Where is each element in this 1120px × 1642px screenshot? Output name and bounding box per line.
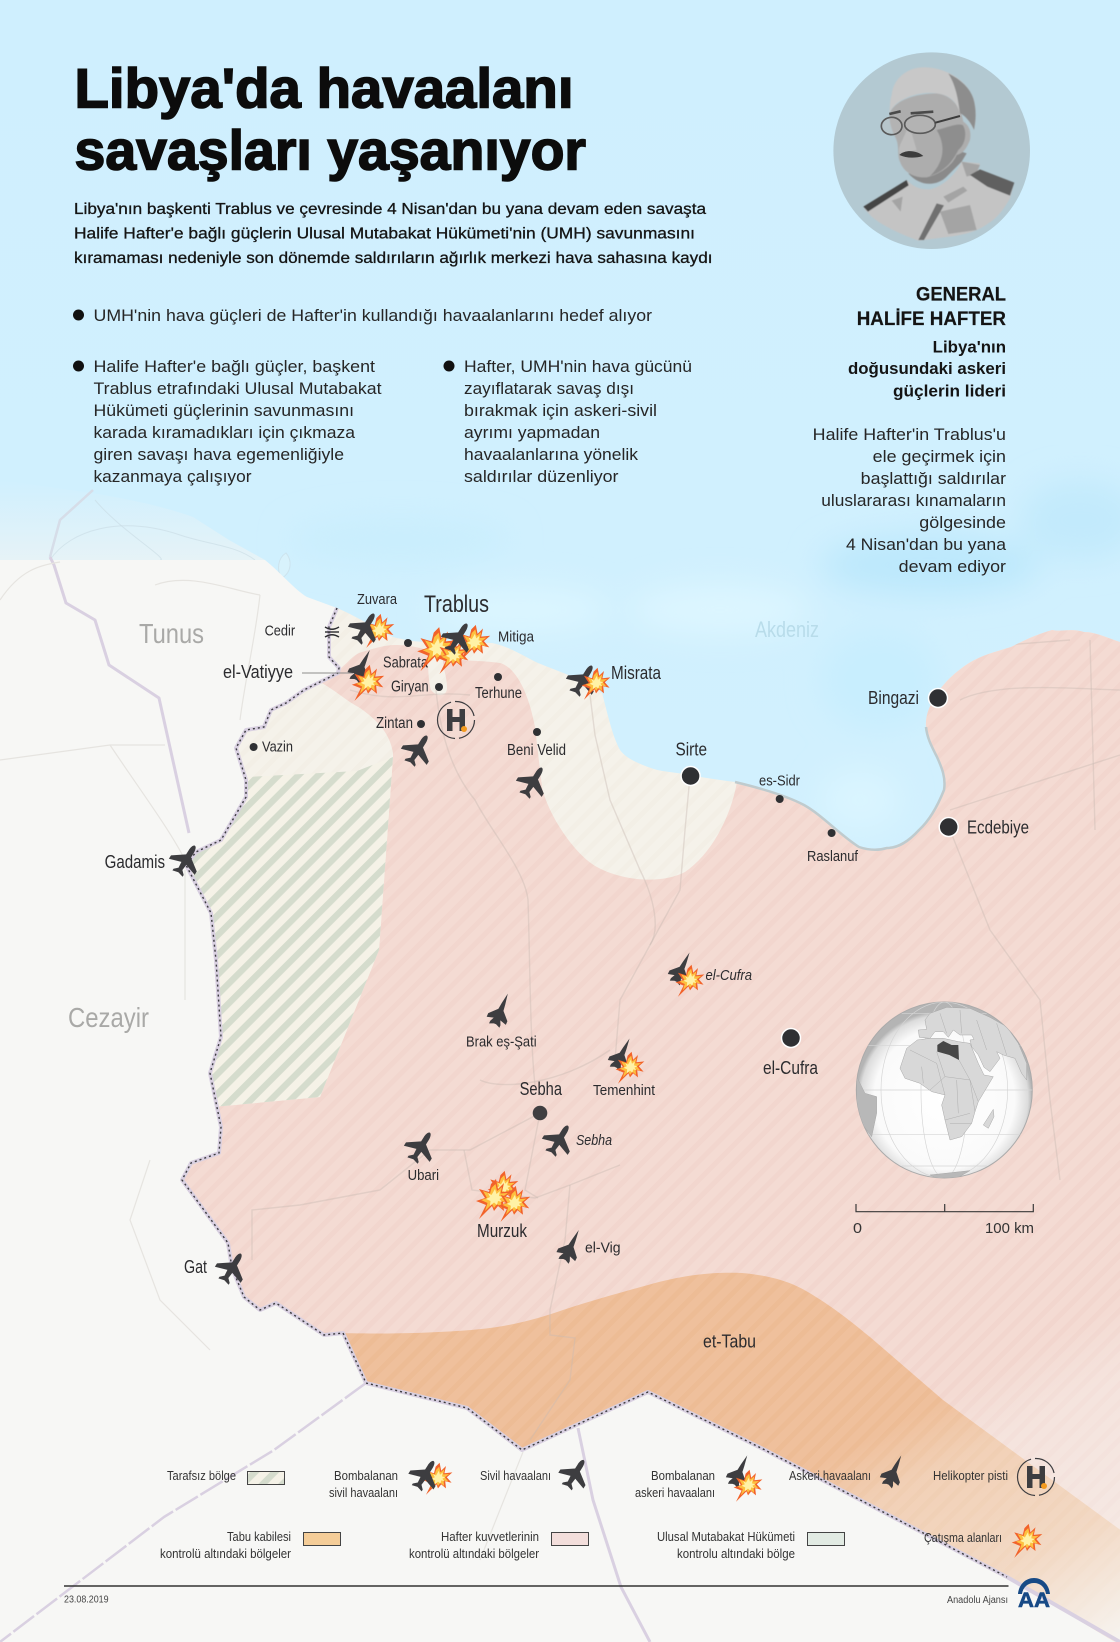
- lede paragraph: Libya'nın başkenti Trablus ve çevresinde 4 Nisan'dan bu yana devam eden savaşta: [74, 201, 706, 218]
- bullet: civil military: zayıflatarak savaş dışı: [464, 379, 634, 398]
- biography heading: [857, 284, 1006, 330]
- city labels: et-Tabu: [703, 1332, 756, 1352]
- locator globe: [856, 1002, 1033, 1178]
- icon: airfield Sebha: [538, 1118, 581, 1162]
- legend: Hafter zone: Hafter kuvvetlerinin: [441, 1529, 539, 1544]
- bullet: civil military: [444, 357, 692, 486]
- city labels: Ecdebiye: [967, 818, 1029, 838]
- icon: Cedir border crossing: [325, 627, 339, 637]
- city labels: Cedir: [265, 623, 295, 640]
- portrait: Halife Hafter: [833, 52, 1030, 249]
- title: [74, 56, 586, 181]
- biography text: devam ediyor: [899, 558, 1007, 576]
- biography heading: GENERAL: [916, 284, 1006, 306]
- title: savaşları yaşanıyor: [74, 118, 586, 181]
- logo: Anadolu Agency: AA: [1018, 1589, 1050, 1612]
- biography text: gölgesinde: [919, 514, 1006, 532]
- lede paragraph: [74, 201, 712, 267]
- country label: Tunus: Tunus: [139, 618, 204, 649]
- city labels: el-Vatiyye: [223, 662, 293, 682]
- icon: airfield Gat: [211, 1246, 254, 1290]
- biography subtitle: doğusundaki askeri: [848, 360, 1006, 378]
- Tebu-held orange zone: [300, 1273, 1120, 1642]
- icon: bombed airfield Zuvara: [344, 606, 394, 650]
- icon: airfield Ubari: [400, 1125, 443, 1169]
- bullet: deadlock: giren savaşı hava egemenliğiyle: [94, 445, 344, 464]
- bullet: deadlock: Hükümeti güçlerinin savunmasını: [94, 401, 354, 420]
- city labels: Ubari: [408, 1167, 439, 1184]
- city labels: Beni Velid: [507, 742, 566, 759]
- city labels: Murzuk: [477, 1221, 528, 1241]
- map scale: [853, 1204, 1034, 1237]
- legend: [160, 1451, 1054, 1561]
- city labels: Brak eş-Şati: [466, 1035, 537, 1051]
- legend: clash zones: [924, 1524, 1042, 1558]
- city labels: Sebha: [520, 1079, 563, 1099]
- city labels: Mitiga: [498, 629, 535, 646]
- bullet: deadlock: Trablus etrafındaki Ulusal Mutabakat: [94, 379, 382, 398]
- legend: government zone: [657, 1529, 844, 1561]
- city labels: Raslanuf: [807, 849, 859, 865]
- bullet: deadlock: kazanmaya çalışıyor: [94, 467, 252, 486]
- icon: helicopter pad Giryan: [438, 702, 474, 738]
- sea tones: [0, 480, 1120, 830]
- map labels: [68, 591, 1029, 1352]
- city labels: Gadamis: [105, 852, 165, 872]
- legend: military airport: [789, 1451, 910, 1490]
- icon: airfield Zintan: [397, 728, 440, 772]
- city dots: [250, 639, 958, 1120]
- logo: Anadolu Agency: [1018, 1578, 1050, 1612]
- city labels: Gat: [184, 1257, 207, 1277]
- biography subtitle: [848, 339, 1006, 401]
- Libya: Government-held cream zone base: [238, 608, 1118, 880]
- icon: military airfield el-Vig: [554, 1225, 588, 1266]
- sea label: Akdeniz: Akdeniz: [755, 617, 819, 642]
- biography text: başlattığı saldırılar: [861, 470, 1007, 488]
- icon: military airfield Brak: [485, 990, 517, 1030]
- footer rule: [64, 1585, 1008, 1587]
- legend: bombed military airport: askeri havaalanı: [635, 1485, 715, 1500]
- bullet: deadlock: Halife Hafter'e bağlı güçler, başkent: [94, 357, 375, 376]
- bottom-right fade: [830, 1354, 1120, 1642]
- city labels: [105, 591, 1029, 1352]
- map scale: 0: [853, 1220, 862, 1237]
- biography subtitle: güçlerin lideri: [893, 383, 1006, 401]
- bullet: air forces: UMH'nin hava güçleri de Hafter'in kullandığı havaalanlarını hedef alıyor: [94, 306, 652, 325]
- legend: clash zones: Çatışma alanları: [924, 1530, 1002, 1545]
- legend: Tebu zone: [160, 1529, 340, 1561]
- neutral hatched zone: [180, 757, 393, 1107]
- biography text: ele geçirmek için: [873, 448, 1006, 466]
- legend: government zone: kontrolu altındaki bölge: [677, 1546, 795, 1561]
- biography subtitle: Libya'nın: [933, 339, 1006, 357]
- legend: Tebu zone: Tabu kabilesi: [227, 1529, 291, 1544]
- legend: civil airport: [480, 1452, 596, 1495]
- legend: government zone: Ulusal Mutabakat Hükümeti: [657, 1529, 795, 1544]
- legend: helicopter pad: Helikopter pisti: [933, 1468, 1008, 1483]
- icon: bombed military airfield el-Vatiyye: [345, 645, 384, 701]
- city labels: Temenhint: [593, 1082, 656, 1099]
- date: 23.08.2019: [64, 1595, 109, 1606]
- legend: bombed civil airport: Bombalanan: [334, 1468, 398, 1483]
- city labels: Giryan: [391, 679, 429, 696]
- bullet: civil military: saldırılar düzenliyor: [464, 467, 619, 486]
- legend: military airport: Askeri havaalanı: [789, 1468, 871, 1483]
- el-Vatiyye leader line: [302, 672, 353, 674]
- city labels: el-Cufra: [706, 968, 752, 984]
- Hafter-held pink zone: [184, 630, 1120, 1530]
- bullet: civil military: Hafter, UMH'nin hava gücünü: [464, 357, 692, 376]
- city labels: Bingazi: [868, 688, 919, 708]
- icon: bombed Mitiga airport with explosions: [417, 616, 490, 674]
- bullet: civil military: ayrımı yapmadan: [464, 423, 600, 442]
- city labels: el-Vig: [585, 1241, 621, 1257]
- biography heading: HALİFE HAFTER: [857, 307, 1006, 330]
- roads outside Libya: [0, 562, 523, 1560]
- icon: bombed military airfield el-Cufra: [666, 948, 704, 997]
- legend: neutral zone: [167, 1468, 284, 1484]
- roads inside Libya: [252, 640, 1120, 1440]
- city labels: Misrata: [611, 663, 662, 683]
- city labels: es-Sidr: [759, 774, 800, 790]
- bullet: civil military: havaalanlarına yönelik: [464, 445, 639, 464]
- icon: bombed military airfield Temenhint: [606, 1034, 644, 1084]
- biography text: uluslararası kınamaların: [821, 492, 1006, 510]
- city labels: Sabrata: [383, 654, 428, 671]
- legend: neutral zone: Tarafsız bölge: [167, 1468, 236, 1483]
- legend: Tebu zone: kontrolü altındaki bölgeler: [160, 1546, 292, 1561]
- faint roads over the pale northern land: [50, 500, 290, 578]
- bullet: deadlock: karada kıramadıkları için çıkmaza: [94, 423, 356, 442]
- lede paragraph: kıramaması nedeniyle son dönemde saldırıların ağırlık merkezi hava sahasına kaydı: [74, 250, 712, 267]
- country label: Cezayir: Cezayir: [68, 1002, 149, 1033]
- city labels: el-Cufra: [763, 1058, 819, 1078]
- land background: [0, 560, 1120, 1642]
- biography text: Halife Hafter'in Trablus'u: [813, 426, 1006, 444]
- legend: bombed civil airport: [329, 1453, 452, 1500]
- city labels: Vazin: [262, 739, 293, 756]
- legend: Hafter zone: kontrolü altındaki bölgeler: [409, 1546, 540, 1561]
- city labels: Sebha: [576, 1133, 612, 1149]
- legend: bombed military airport: [635, 1451, 762, 1502]
- source: Anadolu Ajansı: [947, 1595, 1008, 1606]
- city labels: Zuvara: [357, 591, 398, 608]
- city labels: Zintan: [376, 715, 413, 732]
- icon: bombed airfield Misrata: [562, 658, 610, 702]
- capital label: Trablus: Trablus: [424, 591, 489, 618]
- biography text: 4 Nisan'dan bu yana: [846, 536, 1007, 554]
- legend: Hafter zone: [409, 1529, 588, 1561]
- bullet: deadlock: [73, 357, 382, 486]
- title: Libya'da havaalanı: [74, 56, 574, 119]
- icon: airfield Gadamis: [165, 838, 208, 882]
- city labels: Terhune: [475, 685, 522, 702]
- icon: airfield Beni Velid: [512, 760, 555, 804]
- city labels: Sirte: [676, 740, 707, 760]
- legend: bombed civil airport: sivil havaalanı: [329, 1485, 398, 1500]
- legend: helicopter pad: [933, 1458, 1054, 1496]
- Libya national border: [182, 608, 1120, 1642]
- bullet: civil military: bırakmak için askeri-sivil: [464, 401, 657, 420]
- legend: bombed military airport: Bombalanan: [651, 1468, 715, 1483]
- legend: civil airport: Sivil havaalanı: [480, 1468, 551, 1483]
- map scale: 100 km: [985, 1220, 1034, 1237]
- lede paragraph: Halife Hafter'e bağlı güçlerin Ulusal Mutabakat Hükümeti'nin (UMH) savunmasını: [74, 226, 695, 242]
- neighbouring country borders: [0, 490, 650, 1642]
- icon: clashes at Murzuk: [476, 1171, 530, 1222]
- biography text: [813, 426, 1007, 576]
